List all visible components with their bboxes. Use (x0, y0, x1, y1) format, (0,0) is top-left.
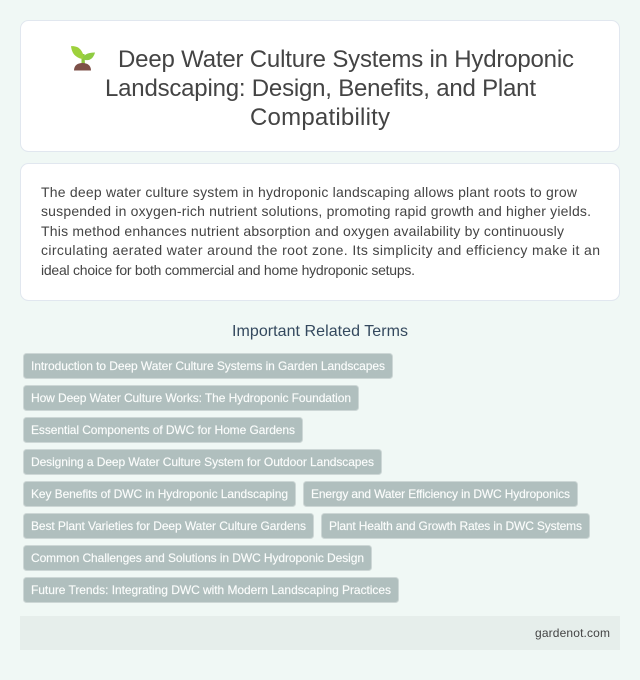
term chip: Energy and Water Efficiency in DWC Hydroponics (311, 487, 570, 501)
summary paragraph (41, 184, 600, 278)
term chip (24, 482, 296, 506)
term chip (322, 514, 590, 538)
term chip (304, 482, 578, 506)
term chip: Key Benefits of DWC in Hydroponic Landscaping (31, 487, 288, 501)
term chip (24, 386, 358, 410)
term chip: Essential Components of DWC for Home Gardens (31, 423, 295, 437)
term chip: Plant Health and Growth Rates in DWC Systems (329, 519, 582, 533)
icon: seedling (71, 46, 95, 70)
title text: Compatibility (250, 104, 390, 131)
summary paragraph: circulating aerated water around the root zone. Its simplicity and efficiency make it an (41, 242, 600, 258)
title card (20, 20, 620, 152)
title text (105, 46, 574, 131)
title text: Landscaping: Design, Benefits, and Plant (105, 75, 536, 102)
term chip: Future Trends: Integrating DWC with Modern Landscaping Practices (31, 583, 391, 597)
summary paragraph: suspended in oxygen-rich nutrient solutions, promoting rapid growth and higher yields. (41, 203, 591, 219)
term chip (24, 418, 302, 442)
footer bar (20, 616, 620, 650)
title text: Deep Water Culture Systems in Hydroponic (118, 46, 574, 73)
term chip (24, 514, 314, 538)
term chip: Introduction to Deep Water Culture Systems in Garden Landscapes (31, 359, 385, 373)
term chip: Designing a Deep Water Culture System for Outdoor Landscapes (31, 455, 374, 469)
term chip: Best Plant Varieties for Deep Water Culture Gardens (31, 519, 306, 533)
term chip (24, 546, 372, 570)
heading: related terms: Important Related Terms (232, 323, 408, 340)
summary paragraph: The deep water culture system in hydroponic landscaping allows plant roots to grow (41, 184, 578, 200)
term chip: Common Challenges and Solutions in DWC Hydroponic Design (31, 551, 364, 565)
footer source: gardenot.com (535, 626, 610, 640)
term chip: How Deep Water Culture Works: The Hydroponic Foundation (31, 391, 351, 405)
summary paragraph: This method enhances nutrient absorption and oxygen availability by continuously (41, 223, 564, 239)
summary paragraph: ideal choice for both commercial and home hydroponic setups. (41, 262, 415, 278)
term chip (24, 578, 398, 602)
terms list (24, 354, 590, 602)
term chip (24, 450, 382, 474)
summary card (20, 164, 620, 300)
term chip (24, 354, 392, 378)
